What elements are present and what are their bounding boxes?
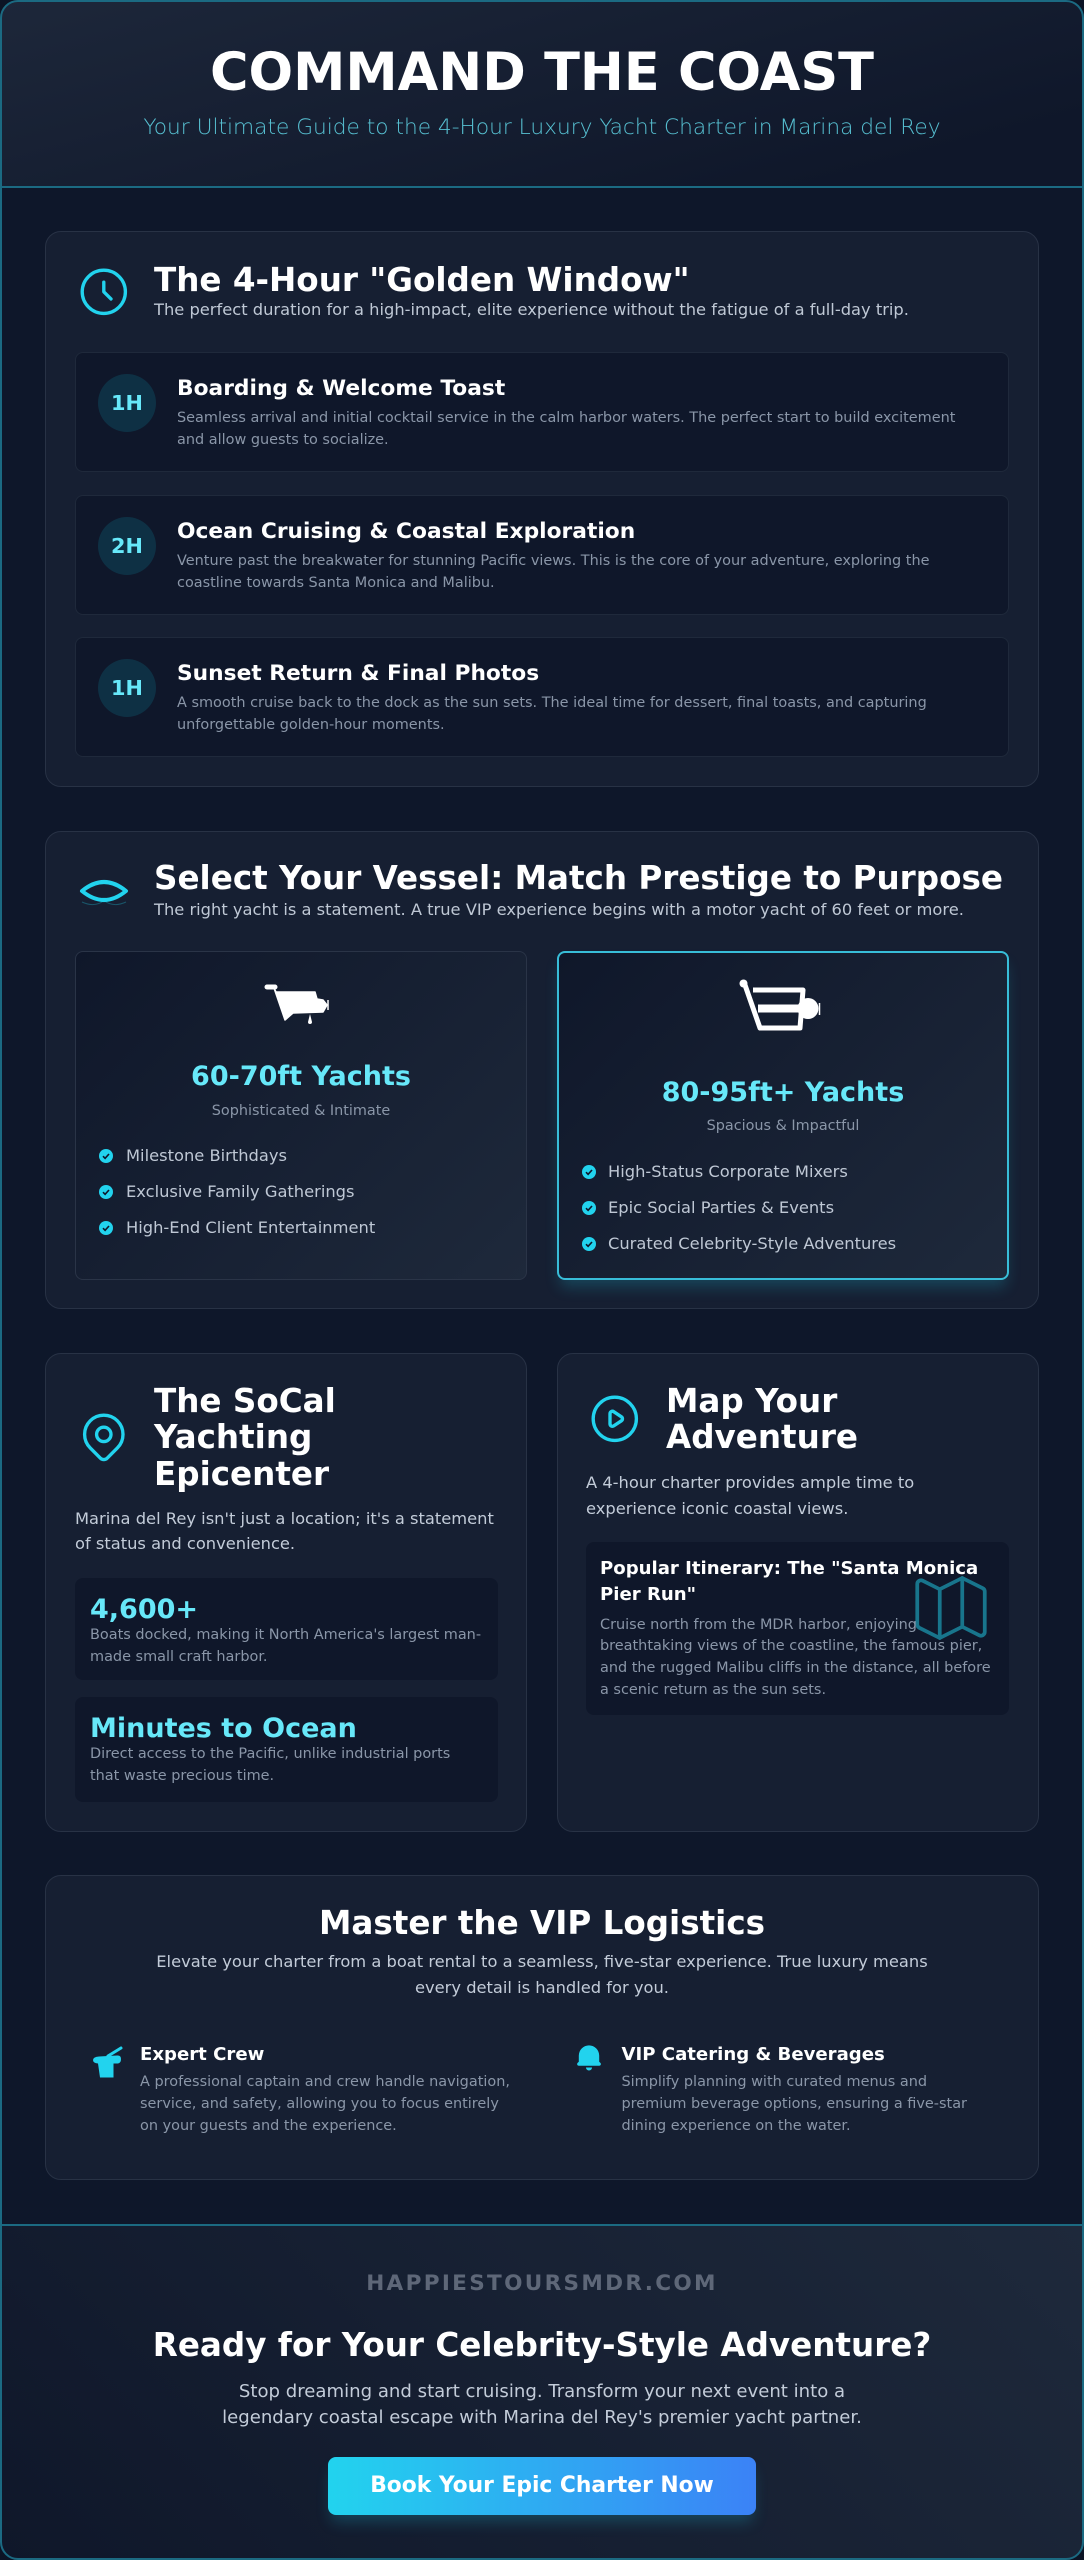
stat description (90, 1746, 450, 1784)
check icon (99, 1185, 113, 1199)
title: COMMAND THE COAST (210, 42, 874, 103)
item title: Ocean Cruising & Coastal Exploration (177, 519, 635, 544)
check icon (582, 1237, 596, 1251)
check icon (99, 1149, 113, 1163)
item description (177, 552, 929, 590)
icon: expert crew (93, 2046, 123, 2078)
badge: 1H (98, 659, 156, 717)
header (0, 0, 1084, 188)
item description: A professional captain and crew handle navigation, (140, 2074, 510, 2090)
item description: and allow guests to socialize. (177, 432, 389, 448)
panel: select your vessel (45, 831, 1039, 1309)
icon: large yacht (740, 980, 820, 1030)
feature: high-status corporate mixers: High-Status Corporate Mixers (608, 1162, 848, 1181)
feature: milestone birthdays: Milestone Birthdays (126, 1146, 287, 1165)
stat number: 4,600+ (90, 1594, 198, 1624)
stat description: Boats docked, making it North America's largest man- (90, 1627, 481, 1643)
intro text: experience iconic coastal views. (586, 1499, 848, 1518)
icon: small yacht (264, 984, 329, 1024)
icon: vessel eye (80, 880, 128, 906)
card: 60-70ft yachts (75, 951, 527, 1280)
check icon (582, 1165, 596, 1179)
intro text (75, 1508, 494, 1553)
panel: socal yachting epicenter (45, 1353, 527, 1832)
item description: Seamless arrival and initial cocktail service in the calm harbor waters. The perfect start to build excitement (177, 410, 955, 426)
item description (622, 2074, 967, 2134)
icon: location pin (82, 1414, 125, 1462)
item description: unforgettable golden-hour moments. (177, 716, 445, 732)
badge: 2H: 2H (111, 534, 143, 558)
icon: map (915, 1576, 987, 1640)
intro text: every detail is handled for you. (415, 1978, 669, 1996)
item title: VIP Catering & Beverages (622, 2044, 885, 2065)
card subtitle: Sophisticated & Intimate (212, 1103, 390, 1119)
website: HAPPIESTOURSMDR.COM (366, 2271, 718, 2296)
heading (666, 1382, 858, 1456)
icon: bell (577, 2045, 601, 2070)
itinerary title: Pier Run" (600, 1584, 696, 1605)
itinerary title (600, 1558, 978, 1605)
stat: 4,600+ (75, 1578, 498, 1680)
heading: Yachting (154, 1418, 312, 1456)
heading: Adventure (666, 1418, 858, 1456)
intro text: of status and convenience. (75, 1534, 295, 1553)
icon: play circle (592, 1396, 638, 1442)
card title: 80-95ft+ Yachts (662, 1076, 904, 1108)
intro text (586, 1473, 914, 1518)
item description: Simplify planning with curated menus and (622, 2074, 927, 2090)
itinerary description: breathtaking views of the coastline, the famous pier, (600, 1638, 982, 1654)
badge: 1H: 1H (111, 676, 143, 700)
button: Book Your Epic Charter Now (370, 2473, 714, 2498)
itinerary description: Cruise north from the MDR harbor, enjoying (600, 1616, 917, 1632)
card subtitle: Spacious & Impactful (707, 1118, 859, 1134)
item description: dining experience on the water. (622, 2118, 851, 2134)
intro text: Marina del Rey isn't just a location; it's a statement (75, 1508, 494, 1528)
item title: Expert Crew (140, 2044, 264, 2065)
itinerary description (600, 1616, 991, 1698)
footer (0, 2224, 1084, 2560)
feature list (582, 1162, 896, 1253)
check icon (99, 1221, 113, 1235)
itinerary box (586, 1542, 1009, 1715)
heading: Select Your Vessel: Match Prestige to Purpose (154, 859, 1003, 897)
item description (177, 410, 956, 448)
check icon (582, 1201, 596, 1215)
stat description: that waste precious time. (90, 1768, 274, 1784)
intro text: A 4-hour charter provides ample time to (586, 1473, 914, 1492)
heading: Epicenter (154, 1455, 329, 1493)
subtitle: Your Ultimate Guide to the 4-Hour Luxury Yacht Charter in Marina del Rey (143, 115, 941, 140)
itinerary title: Popular Itinerary: The "Santa Monica (600, 1558, 978, 1579)
timeline item 3 (75, 637, 1009, 757)
stat description (90, 1627, 481, 1665)
card title: 60-70ft Yachts (191, 1061, 411, 1092)
badge: 1H (98, 374, 156, 432)
itinerary description: and the rugged Malibu cliffs in the distance, all before (600, 1660, 991, 1676)
itinerary description: a scenic return as the sun sets. (600, 1682, 826, 1698)
intro text: The right yacht is a statement. A true VIP experience begins with a motor yacht of 60 feet or more. (154, 900, 964, 919)
item description: service, and safety, allowing you to focus entirely (140, 2096, 499, 2112)
heading: Map Your (666, 1382, 837, 1420)
call-to-action text: Stop dreaming and start cruising. Transform your next event into a (239, 2380, 845, 2402)
intro text: The perfect duration for a high-impact, elite experience without the fatigue of a full-day trip. (154, 300, 909, 319)
item description: Venture past the breakwater for stunning Pacific views. This is the core of your adventure, exploring the (177, 552, 929, 568)
heading: The 4-Hour "Golden Window" (154, 261, 690, 299)
feature: curated celebrity-style adventures: Curated Celebrity-Style Adventures (608, 1234, 896, 1253)
panel: map your adventure (557, 1353, 1039, 1832)
item title: Sunset Return & Final Photos (177, 661, 539, 686)
badge: 1H: 1H (111, 391, 143, 415)
heading (154, 1382, 336, 1493)
call-to-action heading: Ready for Your Celebrity-Style Adventure? (153, 2326, 931, 2364)
item description: premium beverage options, ensuring a five-star (622, 2096, 967, 2112)
item description: A smooth cruise back to the dock as the sun sets. The ideal time for dessert, final toasts, and capturing (177, 694, 927, 710)
icon: clock (80, 268, 128, 316)
item title: Boarding & Welcome Toast (177, 376, 505, 401)
call-to-action text: legendary coastal escape with Marina del Rey's premier yacht partner. (222, 2406, 862, 2428)
feature: exclusive family gatherings: Exclusive Family Gatherings (126, 1182, 354, 1201)
intro text: Elevate your charter from a boat rental to a seamless, five-star experience. True luxury means (156, 1952, 928, 1971)
item description: on your guests and the experience. (140, 2118, 397, 2134)
stat description: made small craft harbor. (90, 1649, 268, 1665)
item description (140, 2074, 510, 2134)
feature: high-end client entertainment: High-End Client Entertainment (126, 1218, 375, 1237)
panel: the 4-hour golden window (45, 231, 1039, 787)
badge: 2H (98, 517, 156, 575)
call-to-action text (222, 2380, 862, 2428)
timeline item 1 (75, 352, 1009, 472)
panel: master the vip logistics (45, 1875, 1039, 2180)
stat title: Minutes to Ocean (90, 1713, 357, 1744)
timeline item 2 (75, 495, 1009, 615)
button (328, 2457, 756, 2515)
card: 80-95ft yachts (557, 951, 1009, 1280)
stat description: Direct access to the Pacific, unlike industrial ports (90, 1746, 450, 1762)
item description: coastline towards Santa Monica and Malibu. (177, 574, 495, 590)
heading: The SoCal (154, 1382, 336, 1420)
stat: minutes to ocean (75, 1697, 498, 1802)
intro text (156, 1952, 928, 1996)
heading: Master the VIP Logistics (319, 1904, 765, 1942)
feature list (99, 1146, 375, 1237)
feature: epic social parties: Epic Social Parties & Events (608, 1198, 834, 1217)
item description (177, 694, 927, 732)
